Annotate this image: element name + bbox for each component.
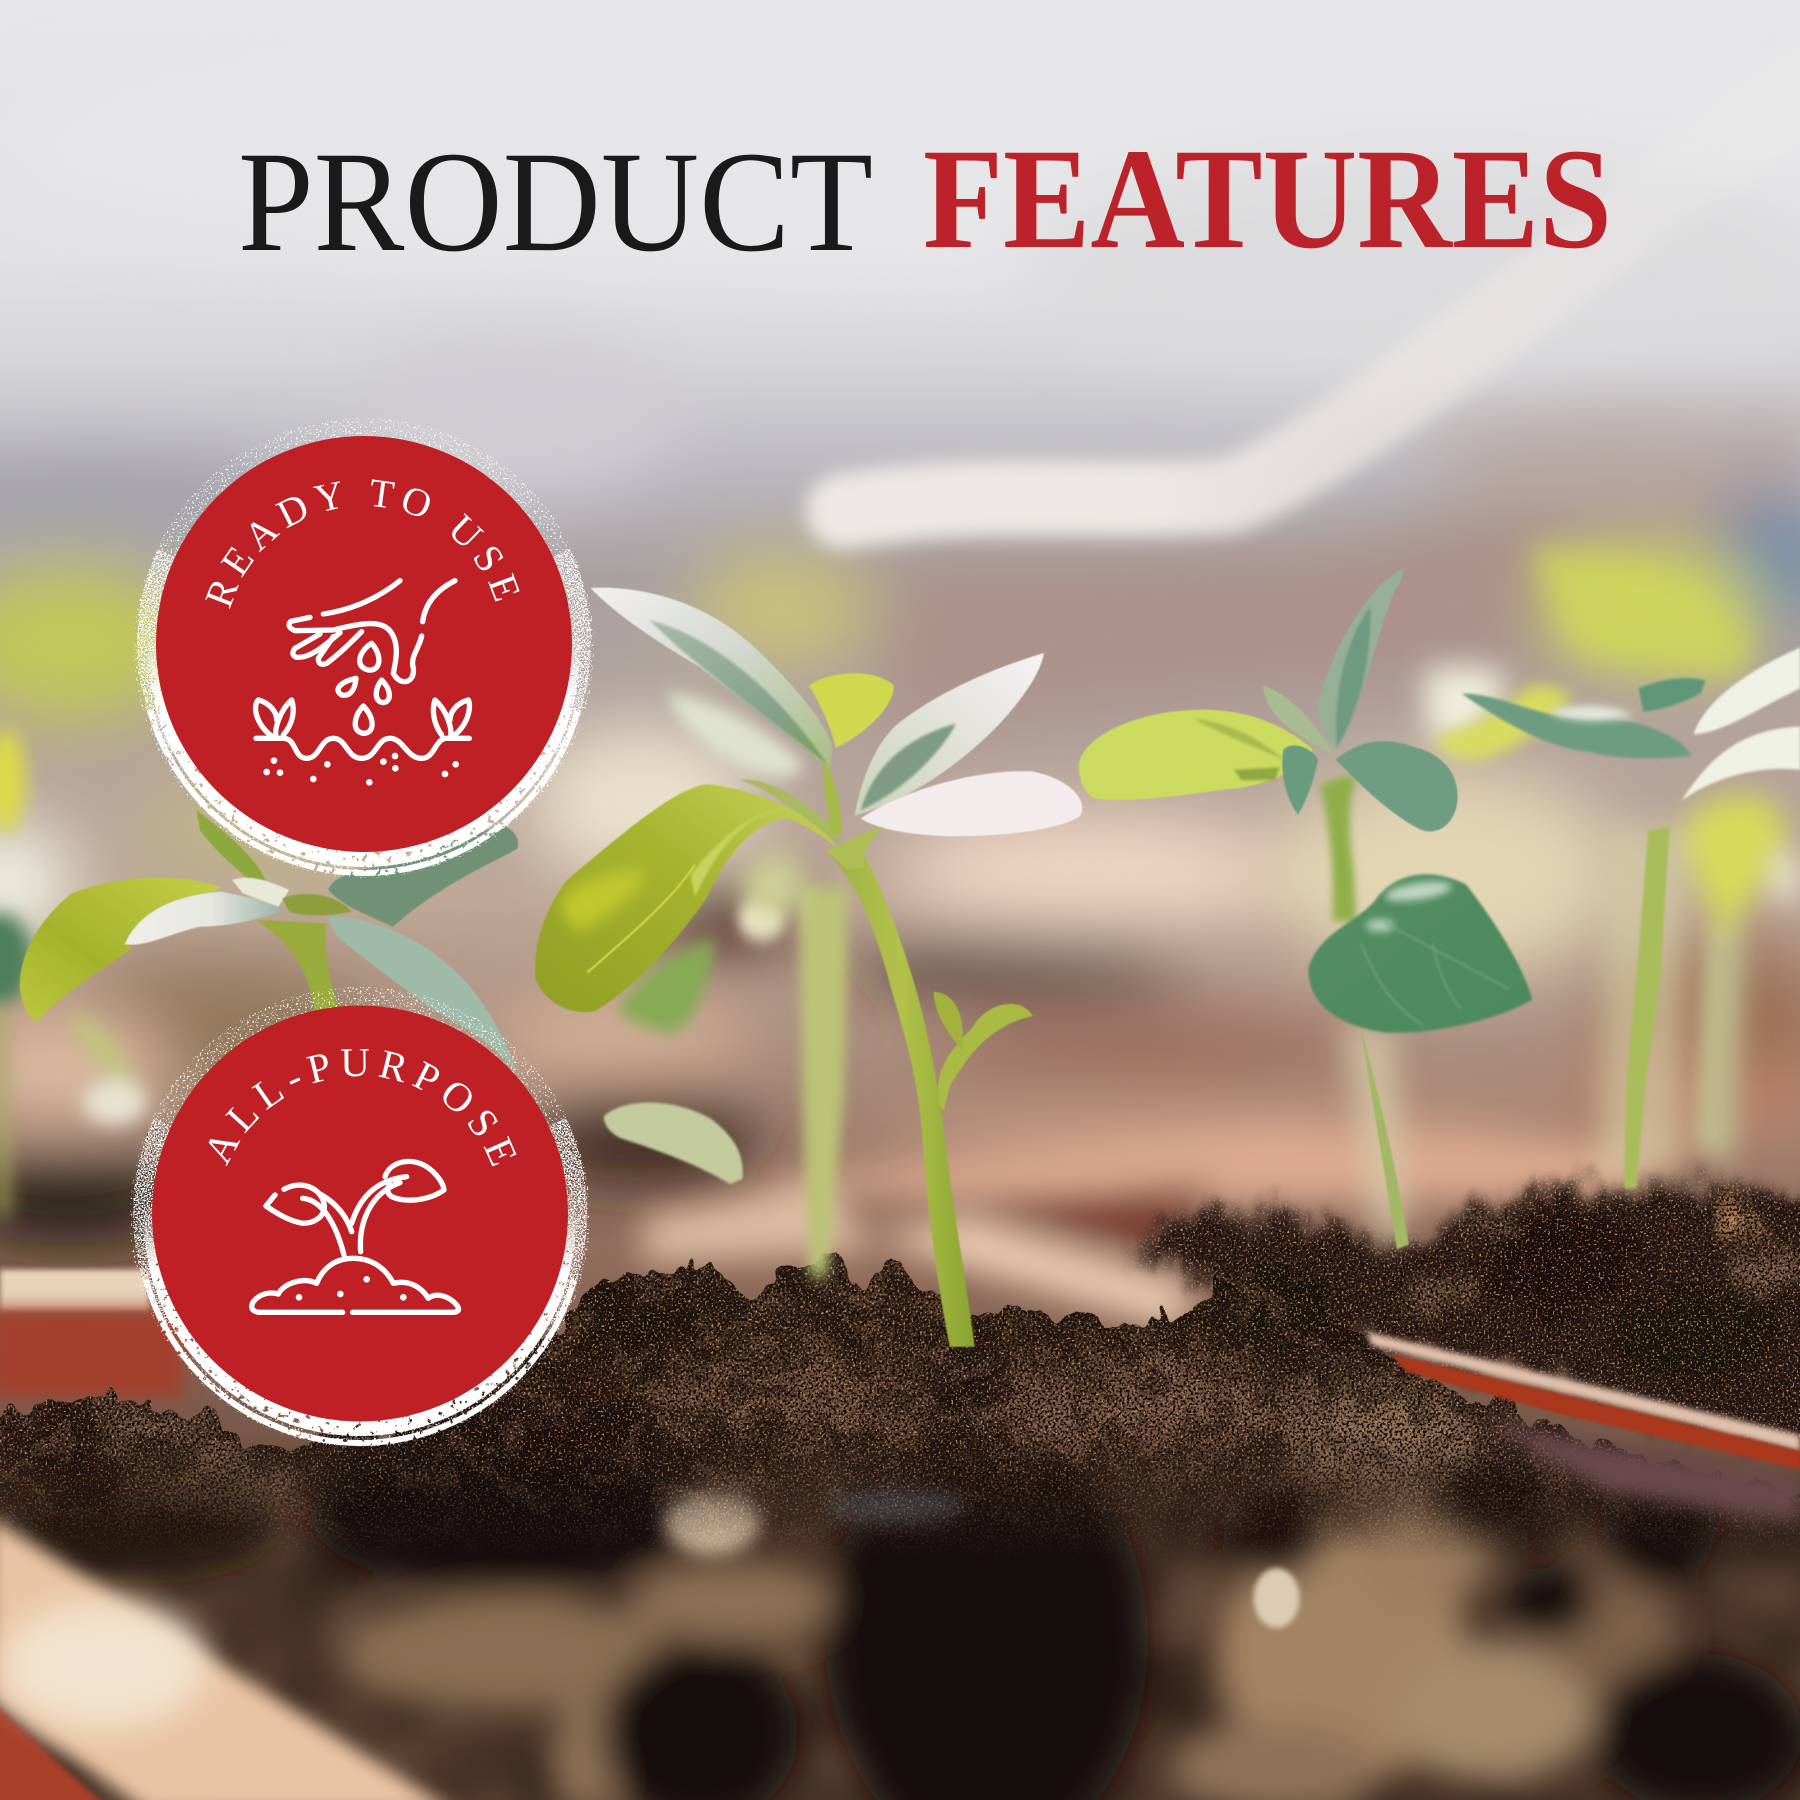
crate edge on right (1481, 1421, 1800, 1521)
back soil on right (1125, 1186, 1800, 1469)
blurred far plant (1342, 548, 1800, 1244)
soil tones (0, 1258, 1720, 1530)
far blurred left items (0, 729, 1722, 1217)
title word: FEATURES: FEATURES (923, 120, 1612, 279)
leaf B (854, 653, 1044, 816)
red circle (156, 436, 572, 852)
sprout (938, 1004, 1033, 1111)
icon: sprout in soil (252, 1161, 459, 1312)
out-of-focus foreground soil (0, 1424, 1800, 1800)
distressed white and dark brush ring (140, 997, 580, 1443)
badge: ready to use (134, 418, 594, 878)
soil, warped with grain (0, 1160, 1800, 1548)
badge: all-purpose (130, 987, 590, 1447)
title (238, 120, 1612, 282)
distressed white brush ring (144, 428, 584, 873)
blurred background bokeh (0, 11, 1800, 1243)
foreground soil (0, 1260, 1800, 1800)
curved label: READY TO USE: READY TO USE (205, 479, 520, 609)
icon: hand sowing seeds (256, 581, 469, 786)
stem (828, 854, 975, 1347)
blurred white hose (844, 80, 1800, 511)
red circle (152, 1006, 568, 1422)
right seedlings (1079, 548, 1800, 1249)
leaf C (861, 771, 1082, 836)
lower background bands and crate edges (643, 1131, 1699, 1332)
left seedling (20, 810, 518, 1075)
crate corner at bottom left (0, 1515, 459, 1800)
center seedling (535, 588, 1082, 1347)
title word: PRODUCT: PRODUCT (238, 123, 873, 282)
soil mottling (60, 1258, 1610, 1520)
leaf D (535, 784, 838, 1012)
blurred background seedling (616, 694, 848, 1276)
curved label: ALL-PURPOSE: ALL-PURPOSE (208, 1049, 516, 1166)
leaf A (590, 588, 833, 770)
